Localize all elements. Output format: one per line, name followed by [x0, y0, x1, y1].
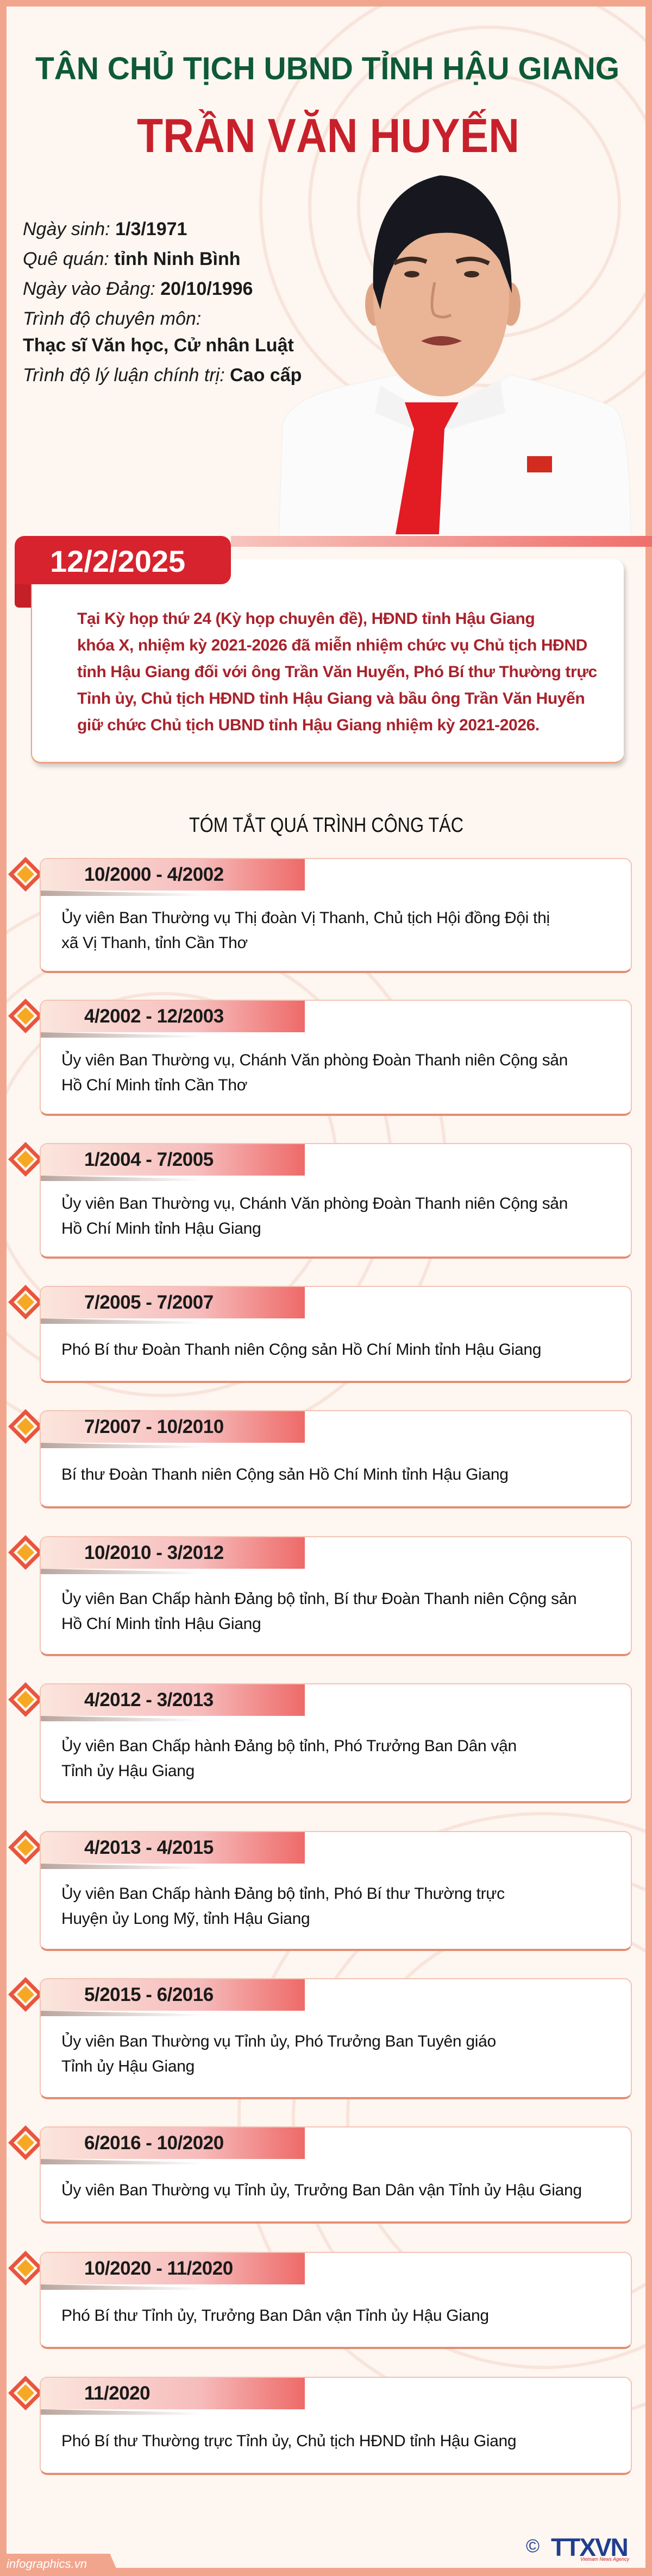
card: 4/2002 - 12/2003	[40, 1000, 632, 1116]
date banner: 12/2/2025: 12/2/2025	[50, 544, 185, 578]
card: 1/2004 - 7/2005: Hồ Chí Minh tỉnh Hậu Giang	[61, 1220, 261, 1237]
card: 7/2005 - 7/2007: Phó Bí thư Đoàn Thanh niên Cộng sản Hồ Chí Minh tỉnh Hậu Giang	[61, 1340, 541, 1359]
title: TRẦN VĂN HUYẾN	[137, 109, 519, 162]
personal info: Ngày sinh: 1/3/1971	[23, 219, 187, 239]
section heading: TÓM TẮT QUÁ TRÌNH CÔNG TÁC	[189, 813, 463, 837]
card: 10/2020 - 11/2020	[40, 2252, 632, 2349]
card: 5/2015 - 6/2016: Ủy viên Ban Thường vụ Tỉnh ủy, Phó Trưởng Ban Tuyên giáo	[61, 2032, 496, 2050]
personal info: Thạc sĩ Văn học, Cử nhân Luật	[23, 335, 294, 356]
card: 10/2000 - 4/2002	[40, 858, 632, 973]
card: 10/2000 - 4/2002: 10/2000 - 4/2002	[84, 864, 224, 885]
card: 5/2015 - 6/2016: 5/2015 - 6/2016	[84, 1984, 214, 2005]
personal info: Quê quán: tỉnh Ninh Bình	[23, 249, 241, 269]
card: 7/2007 - 10/2010: Bí thư Đoàn Thanh niên Cộng sản Hồ Chí Minh tỉnh Hậu Giang	[61, 1465, 509, 1483]
card: 4/2002 - 12/2003: Ủy viên Ban Thường vụ, Chánh Văn phòng Đoàn Thanh niên Cộng sản	[61, 1051, 568, 1069]
card: 1/2004 - 7/2005: 1/2004 - 7/2005	[84, 1149, 214, 1170]
card: 11/2020: 11/2020	[84, 2383, 150, 2404]
card: 4/2012 - 3/2013: Tỉnh ủy Hậu Giang	[61, 1761, 195, 1780]
card: 4/2002 - 12/2003: 4/2002 - 12/2003	[84, 1006, 224, 1027]
card: 7/2005 - 7/2007	[40, 1286, 632, 1383]
description box: tỉnh Hậu Giang đối với ông Trần Văn Huyến, Phó Bí thư Thường trực	[77, 663, 597, 681]
card: 4/2013 - 4/2015: Huyện ủy Long Mỹ, tỉnh Hậu Giang	[61, 1909, 310, 1928]
footer bar	[0, 2568, 652, 2576]
card: 1/2004 - 7/2005: Ủy viên Ban Thường vụ, Chánh Văn phòng Đoàn Thanh niên Cộng sản	[61, 1195, 568, 1212]
card: 7/2007 - 10/2010: 7/2007 - 10/2010	[84, 1416, 224, 1437]
card: 4/2012 - 3/2013	[40, 1683, 632, 1803]
personal info: Ngày vào Đảng: 20/10/1996	[23, 279, 253, 299]
card: 4/2013 - 4/2015	[40, 1831, 632, 1951]
title	[35, 50, 619, 162]
card: 1/2004 - 7/2005	[40, 1143, 632, 1259]
card: 4/2013 - 4/2015: Ủy viên Ban Chấp hành Đảng bộ tỉnh, Phó Bí thư Thường trực	[61, 1884, 505, 1903]
card: 11/2020: Phó Bí thư Thường trực Tỉnh ủy, Chủ tịch HĐND tỉnh Hậu Giang	[61, 2432, 516, 2450]
card: 10/2000 - 4/2002: xã Vị Thanh, tỉnh Cần Thơ	[61, 934, 248, 952]
card: 10/2010 - 3/2012	[40, 1536, 632, 1656]
diamond markers	[8, 857, 40, 2410]
description box: Tại Kỳ họp thứ 24 (Kỳ họp chuyên đề), HĐND tỉnh Hậu Giang	[77, 610, 535, 628]
card: 10/2020 - 11/2020: Phó Bí thư Tỉnh ủy, Trưởng Ban Dân vận Tỉnh ủy Hậu Giang	[61, 2307, 489, 2324]
personal info: Trình độ chuyên môn:	[23, 308, 201, 329]
card: 6/2016 - 10/2020	[40, 2126, 632, 2224]
logo: TTXVN: Vietnam News Agency	[580, 2556, 629, 2562]
card: 5/2015 - 6/2016	[40, 1978, 632, 2099]
card: 4/2002 - 12/2003: Hồ Chí Minh tỉnh Cần Thơ	[61, 1076, 247, 1094]
logo: TTXVN: ©	[526, 2536, 540, 2556]
card: 10/2000 - 4/2002: Ủy viên Ban Thường vụ Thị đoàn Vị Thanh, Chủ tịch Hội đồng Đội thị	[61, 909, 550, 927]
card: 4/2012 - 3/2013: 4/2012 - 3/2013	[84, 1689, 214, 1710]
card: 6/2016 - 10/2020: Ủy viên Ban Thường vụ Tỉnh ủy, Trưởng Ban Dân vận Tỉnh ủy Hậu Giang	[61, 2181, 582, 2199]
footer source: infographics.vn: infographics.vn	[7, 2557, 87, 2571]
portrait illustration	[279, 175, 631, 536]
logo: TTXVN: TTXVN	[551, 2533, 628, 2561]
card: 10/2010 - 3/2012: Ủy viên Ban Chấp hành Đảng bộ tỉnh, Bí thư Đoàn Thanh niên Cộng sản	[61, 1590, 576, 1607]
title: TÂN CHỦ TỊCH UBND TỈNH HẬU GIANG	[35, 51, 619, 86]
card: 4/2012 - 3/2013: Ủy viên Ban Chấp hành Đảng bộ tỉnh, Phó Trưởng Ban Dân vận	[61, 1737, 517, 1755]
card: 6/2016 - 10/2020: 6/2016 - 10/2020	[84, 2132, 224, 2154]
card: 7/2007 - 10/2010	[40, 1410, 632, 1508]
personal info: Trình độ lý luận chính trị: Cao cấp	[23, 365, 302, 386]
card: 10/2010 - 3/2012: 10/2010 - 3/2012	[84, 1542, 224, 1563]
date banner: 12/2/2025	[15, 536, 652, 769]
card: 10/2020 - 11/2020: 10/2020 - 11/2020	[84, 2258, 233, 2279]
card: 4/2013 - 4/2015: 4/2013 - 4/2015	[84, 1837, 214, 1858]
description box: khóa X, nhiệm kỳ 2021-2026 đã miễn nhiệm chức vụ Chủ tịch HĐND	[77, 636, 587, 654]
description box: Tỉnh ủy, Chủ tịch HĐND tỉnh Hậu Giang và bầu ông Trần Văn Huyến	[77, 690, 585, 708]
card: 10/2010 - 3/2012: Hồ Chí Minh tỉnh Hậu Giang	[61, 1615, 261, 1632]
card: 7/2005 - 7/2007: 7/2005 - 7/2007	[84, 1292, 214, 1313]
personal info	[23, 219, 302, 386]
description box: giữ chức Chủ tịch UBND tỉnh Hậu Giang nhiệm kỳ 2021-2026.	[77, 716, 540, 734]
footer source: infographics.vn	[7, 2554, 116, 2571]
card: 11/2020	[40, 2377, 632, 2475]
description box	[31, 559, 624, 763]
card: 5/2015 - 6/2016: Tỉnh ủy Hậu Giang	[61, 2057, 195, 2075]
